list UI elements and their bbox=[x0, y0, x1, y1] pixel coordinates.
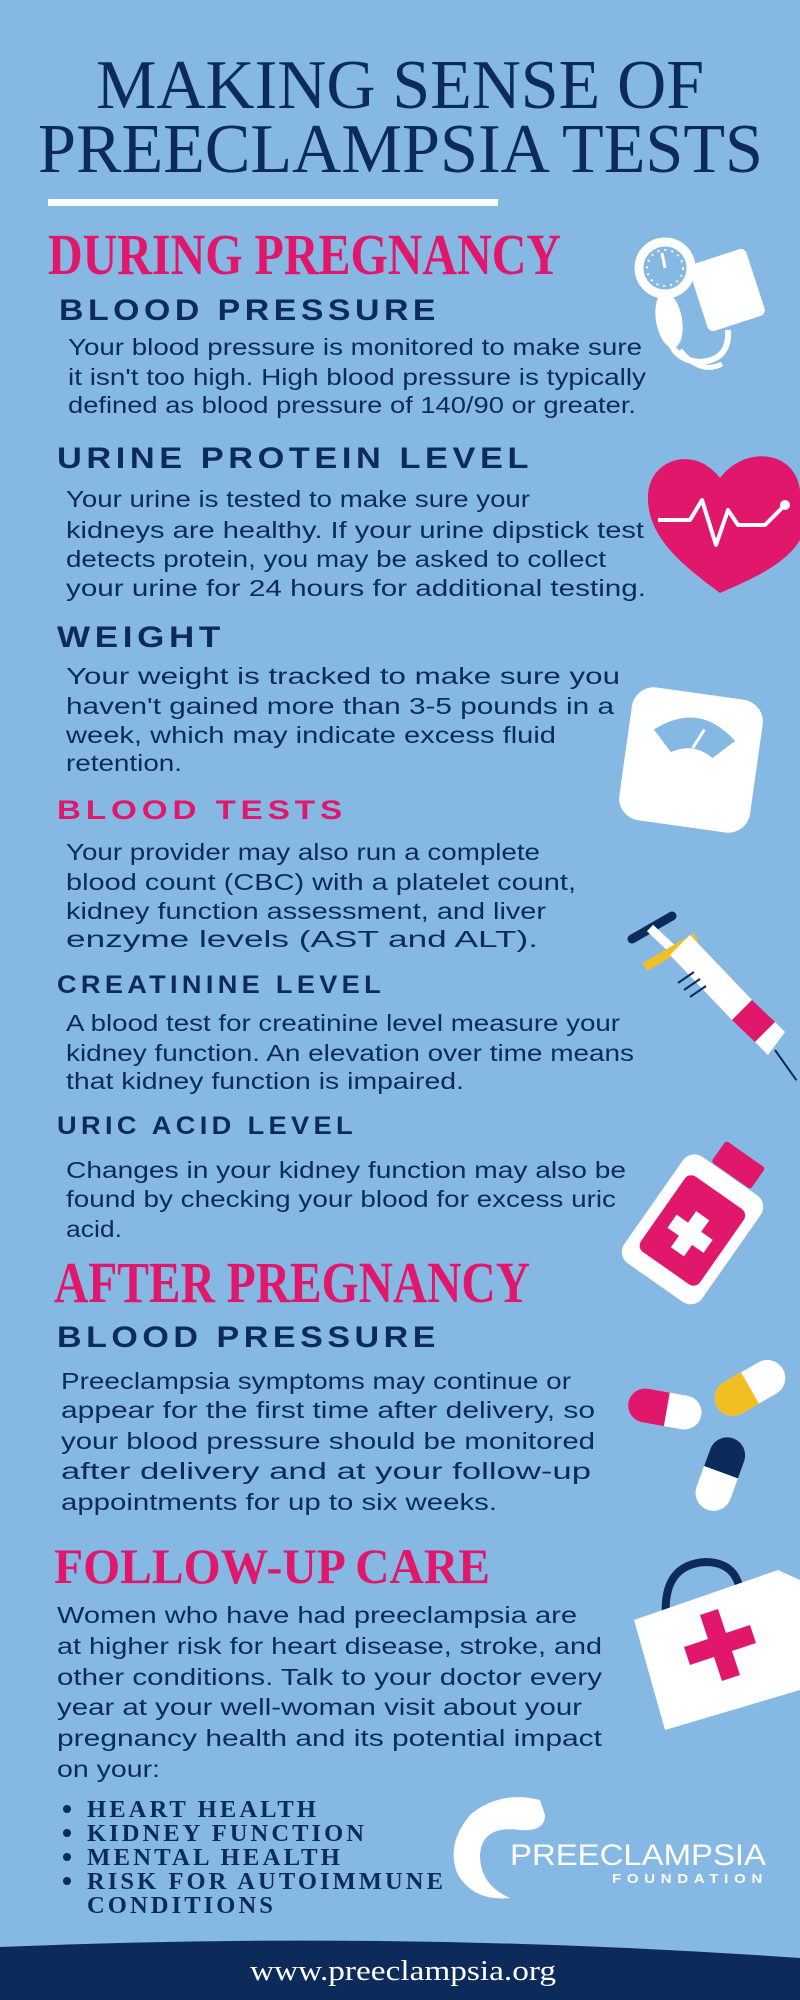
list: health areas: CONDITIONS bbox=[87, 1893, 276, 1919]
section: blood tests: enzyme levels (AST and ALT). bbox=[66, 926, 538, 952]
section: blood tests: kidney function assessment, and liver bbox=[66, 898, 546, 924]
heading: after pregnancy: AFTER PREGNANCY bbox=[54, 1250, 530, 1315]
section: urine protein level: kidneys are healthy. If your urine dipstick test bbox=[66, 517, 645, 543]
section: uric acid level: acid. bbox=[66, 1216, 122, 1242]
text: follow-up body: on your: bbox=[57, 1756, 160, 1782]
logo: preeclampsia foundation: PREECLAMPSIA bbox=[510, 1839, 766, 1872]
section: urine protein level: Your urine is tested to make sure your bbox=[66, 486, 530, 512]
icon: syringe bbox=[632, 916, 799, 1080]
section: weight: haven't gained more than 3-5 pounds in a bbox=[66, 693, 614, 719]
section: blood tests bbox=[57, 795, 576, 952]
logo: preeclampsia foundation bbox=[454, 1797, 768, 1899]
list: health areas: HEART HEALTH bbox=[87, 1797, 319, 1823]
section: after blood pressure: your blood pressure should be monitored bbox=[61, 1428, 595, 1454]
title bbox=[38, 47, 763, 188]
logo: preeclampsia foundation: FOUNDATION bbox=[612, 1871, 768, 1886]
section: creatinine level: CREATININE LEVEL bbox=[57, 971, 385, 999]
heading: during pregnancy: DURING PREGNANCY bbox=[48, 222, 561, 287]
section: after blood pressure: Preeclampsia symptoms may continue or bbox=[61, 1368, 571, 1394]
icon: scale bbox=[616, 684, 766, 836]
text: follow-up body: pregnancy health and its potential impact bbox=[57, 1725, 603, 1751]
section: blood pressure: BLOOD PRESSURE bbox=[59, 294, 440, 327]
icon: medical bag bbox=[634, 1562, 800, 1730]
section: uric acid level bbox=[57, 1112, 626, 1242]
section: urine protein level: your urine for 24 hours for additional testing. bbox=[66, 575, 646, 601]
section: creatinine level: that kidney function is impaired. bbox=[66, 1068, 464, 1094]
section: blood tests: Your provider may also run a complete bbox=[66, 839, 540, 865]
heading: follow-up care: FOLLOW-UP CARE bbox=[54, 1538, 490, 1594]
section: creatinine level: A blood test for creatinine level measure your bbox=[66, 1010, 620, 1036]
title: MAKING SENSE OF bbox=[96, 47, 704, 124]
section: urine protein level bbox=[57, 442, 646, 601]
section: creatinine level bbox=[57, 971, 634, 1094]
title: PREECLAMPSIA TESTS bbox=[38, 111, 763, 188]
section: blood pressure bbox=[59, 294, 647, 418]
section: blood pressure: it isn't too high. High blood pressure is typically bbox=[68, 364, 647, 390]
text: follow-up body: Women who have had preeclampsia are bbox=[57, 1602, 577, 1628]
text: follow-up body: year at your well-woman visit about your bbox=[57, 1694, 582, 1720]
section: weight: Your weight is tracked to make sure you bbox=[66, 663, 620, 689]
section: uric acid level: found by checking your blood for excess uric bbox=[66, 1186, 616, 1212]
section: after blood pressure: after delivery and at your follow-up bbox=[61, 1458, 591, 1484]
section: blood tests: BLOOD TESTS bbox=[57, 795, 347, 825]
icon: medicine bottle bbox=[616, 1127, 784, 1310]
section: weight: retention. bbox=[66, 750, 182, 776]
section: uric acid level: Changes in your kidney function may also be bbox=[66, 1157, 626, 1183]
section: blood tests: blood count (CBC) with a platelet count, bbox=[66, 869, 576, 895]
text: follow-up body: other conditions. Talk to your doctor every bbox=[57, 1664, 603, 1690]
section: after blood pressure bbox=[57, 1321, 595, 1515]
list: health areas: KIDNEY FUNCTION bbox=[87, 1821, 367, 1847]
text: follow-up body: at higher risk for heart disease, stroke, and bbox=[57, 1633, 602, 1659]
section: blood pressure: defined as blood pressure of 140/90 or greater. bbox=[68, 392, 636, 418]
list: health areas: RISK FOR AUTOIMMUNE bbox=[87, 1869, 446, 1895]
list: health areas bbox=[63, 1797, 446, 1919]
section: after blood pressure: appear for the first time after delivery, so bbox=[61, 1397, 595, 1423]
section: urine protein level: URINE PROTEIN LEVEL bbox=[57, 442, 533, 475]
section: weight: week, which may indicate excess fluid bbox=[65, 722, 556, 748]
icon: heart bbox=[648, 456, 800, 593]
section: after blood pressure: appointments for up to six weeks. bbox=[61, 1489, 497, 1515]
section: creatinine level: kidney function. An elevation over time means bbox=[66, 1040, 634, 1066]
section: weight: WEIGHT bbox=[57, 621, 225, 654]
section: uric acid level: URIC ACID LEVEL bbox=[57, 1112, 357, 1140]
footer bbox=[0, 1941, 800, 2000]
footer: www.preeclampsia.org bbox=[250, 1955, 556, 1987]
section: weight bbox=[57, 621, 620, 776]
section: after blood pressure: BLOOD PRESSURE bbox=[57, 1321, 440, 1354]
icon: blood pressure gauge bbox=[639, 242, 766, 367]
section: blood pressure: Your blood pressure is monitored to make sure bbox=[68, 334, 642, 360]
section: urine protein level: detects protein, you may be asked to collect bbox=[66, 546, 607, 572]
icon: pills bbox=[625, 1353, 792, 1516]
text: follow-up body bbox=[57, 1602, 603, 1782]
list: health areas: MENTAL HEALTH bbox=[87, 1845, 343, 1871]
